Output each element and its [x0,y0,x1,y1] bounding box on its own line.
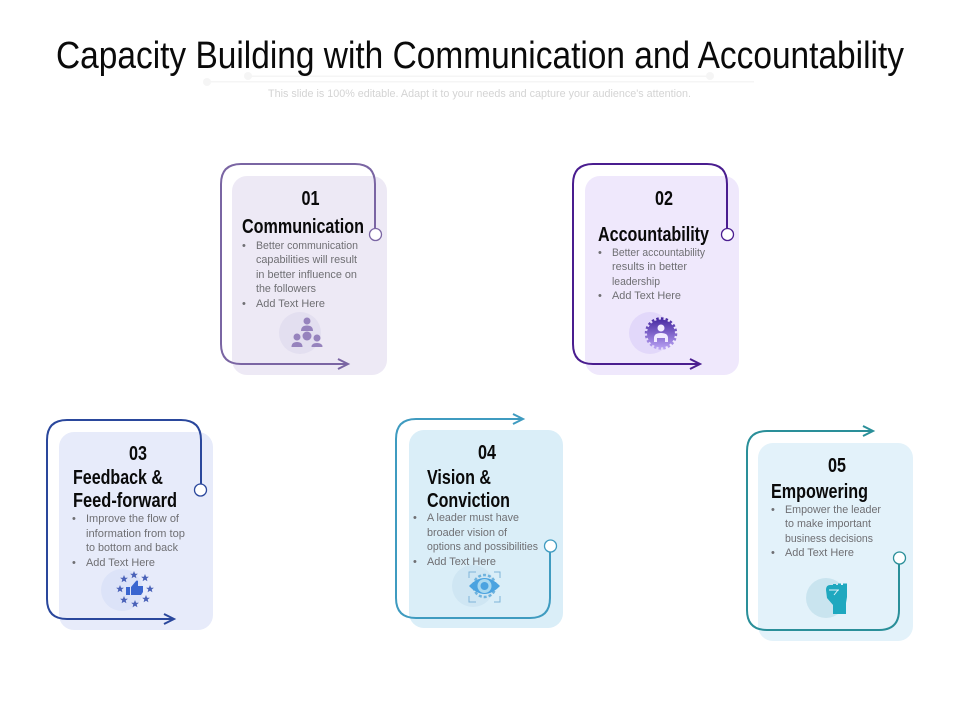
panel: 02 Accountability [573,164,739,375]
icon: people network [279,312,322,354]
panel: 04 Vision and Conviction: Vision & [427,467,491,489]
panel: 03 Feedback and Feed-forward: Feedback & [73,467,163,489]
panel: 02 Accountability: Accountability [598,224,710,246]
panel: 05 Empowering: 05 [828,455,846,477]
panel: 01 Communication: • [242,298,246,310]
panel: 02 Accountability: Better accountability [612,247,705,259]
panel: 05 Empowering: Empower the leader [785,504,881,516]
subtitle: This slide is 100% editable. Adapt it to your needs and capture your audience's attention. [268,88,691,100]
panel: 04 Vision and Conviction: options and possibilities [427,541,538,553]
panel: 04 Vision and Conviction: • [413,556,417,568]
panel: 01 Communication: Add Text Here [256,298,325,310]
panel: 03 Feedback and Feed-forward: Improve the flow of [86,513,180,525]
panel: 03 Feedback and Feed-forward [47,420,213,630]
panel: 05 Empowering: business decisions [785,533,873,545]
panel: 04 Vision and Conviction: A leader must have [427,512,519,524]
panel: 04 Vision and Conviction: Add Text Here [427,556,496,568]
panel: 04 Vision and Conviction: 04 [478,442,497,464]
panel: 03 Feedback and Feed-forward: information from top [86,528,185,540]
panel: 05 Empowering: Empowering [771,481,868,503]
panel: 03 Feedback and Feed-forward: 03 [129,443,147,465]
panel: 02 Accountability: • [598,247,602,259]
panel: 05 Empowering: • [771,504,775,516]
panel: 05 Empowering: Add Text Here [785,547,854,559]
panel: 02 Accountability: leadership [612,276,660,288]
panel: 01 Communication: Communication [242,216,364,238]
icon: thumbs up with stars [101,569,154,611]
panel: 01 Communication: in better influence on [256,269,357,281]
panel: 02 Accountability: 02 [655,188,673,210]
panel: 02 Accountability: • [598,290,602,302]
panel: 02 Accountability: results in better [612,261,687,273]
panel: 01 Communication: • [242,240,246,252]
icon: raised fist [806,578,847,618]
panel: 05 Empowering: • [771,547,775,559]
panel: 04 Vision and Conviction [396,414,563,628]
panel: 05 Empowering [747,426,913,641]
panel: 03 Feedback and Feed-forward: Feed-forward [73,490,177,512]
panel: 03 Feedback and Feed-forward: • [72,557,76,569]
panel: 03 Feedback and Feed-forward: to bottom and back [86,542,178,554]
panel: 04 Vision and Conviction: • [413,512,417,524]
panel: 03 Feedback and Feed-forward: • [72,513,76,525]
panel: 04 Vision and Conviction: broader vision of [427,527,508,539]
panel: 05 Empowering: to make important [785,518,871,530]
panel: 01 Communication: Better communication [256,240,358,252]
panel: 01 Communication: 01 [302,188,320,210]
panel: 01 Communication: the followers [256,283,316,295]
panel: 02 Accountability: Add Text Here [612,290,681,302]
panel: 01 Communication: capabilities will result [256,254,357,266]
icon: gear with person [629,312,676,354]
panel: 04 Vision and Conviction: Conviction [427,490,510,512]
panel: 01 Communication [221,164,387,375]
panel: 03 Feedback and Feed-forward: Add Text Here [86,557,155,569]
icon: eye with gear [452,565,500,607]
